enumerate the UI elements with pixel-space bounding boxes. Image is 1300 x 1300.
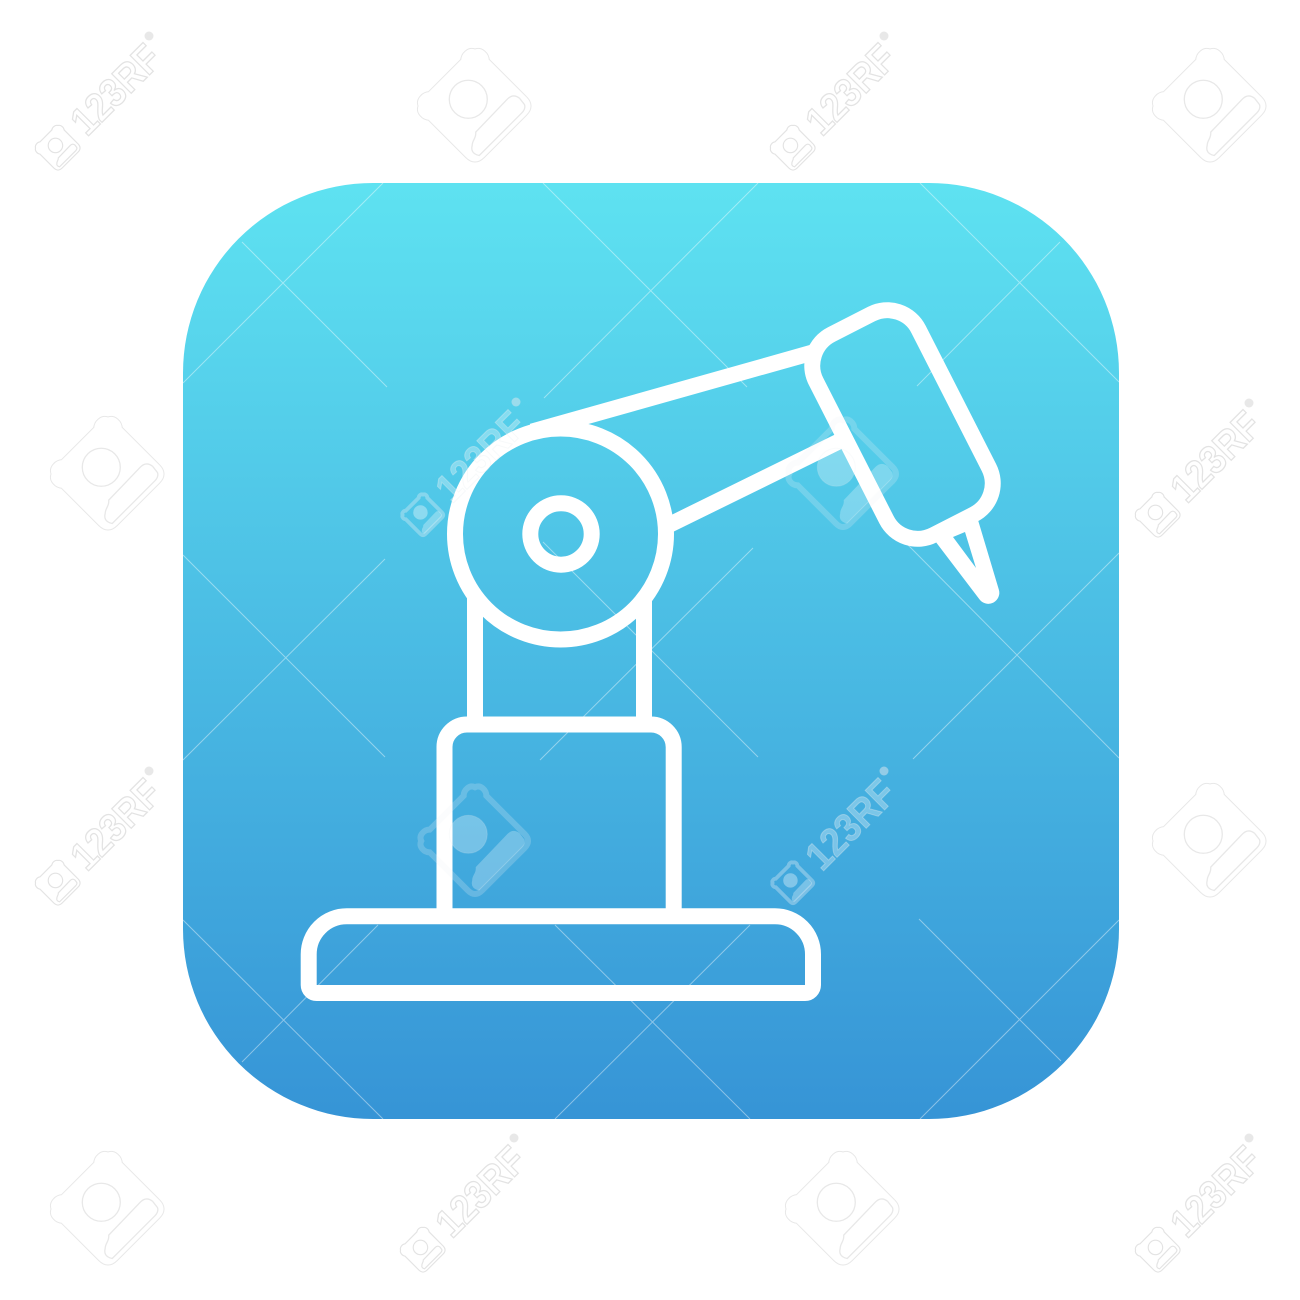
watermark: 123RF third row left: 123RF — [62, 771, 170, 879]
watermark: 123RF bottom centre — [400, 1134, 535, 1272]
watermark: logo bottom left — [47, 1148, 167, 1268]
panel: blue gradient rounded tile — [183, 183, 1119, 1119]
watermark: logo bottom centre right — [782, 1148, 902, 1268]
watermark: 123RF near base — [770, 766, 905, 905]
watermark: logo over column — [414, 780, 534, 900]
watermark: 123RF top left: 123RF — [62, 36, 170, 144]
watermark: logo second row left — [47, 413, 167, 533]
icon part: pivot ring — [530, 503, 592, 565]
watermark: 123RF second row right — [1135, 398, 1270, 537]
icon part: neck — [475, 596, 644, 725]
watermark: 123RF bottom centre: 123RF — [427, 1138, 535, 1246]
watermark: 123RF on shoulder: 123RF — [427, 403, 535, 511]
icon part: upper arm — [532, 351, 818, 432]
watermark: logo over lower arm — [782, 413, 902, 533]
icon part: column — [444, 724, 674, 917]
watermark: 123RF second row right: 123RF — [1162, 403, 1270, 511]
watermark: 123RF bottom right: 123RF — [1162, 1138, 1270, 1246]
watermark: logo top centre — [414, 45, 534, 165]
watermark: 123RF top left — [35, 32, 170, 170]
watermark: logo top far right — [1149, 45, 1269, 165]
watermark: 123RF top right: 123RF — [797, 36, 905, 144]
icon part: tool head — [800, 298, 1005, 551]
icon part: shoulder joint — [455, 428, 666, 640]
watermark: 123RF near base: 123RF — [797, 771, 905, 879]
icon: robotic arm — [309, 298, 1005, 993]
watermarks over the tile — [400, 398, 905, 905]
watermark: 123RF third row left — [35, 766, 170, 905]
icon part: lower arm — [665, 436, 850, 527]
watermark: logo third row right — [1149, 780, 1269, 900]
icon part: base plate — [309, 916, 813, 993]
watermark: 123RF bottom right — [1135, 1134, 1270, 1272]
watermark: 123RF top right — [770, 32, 905, 170]
icon part: tool tip — [933, 518, 999, 604]
watermark: 123RF on shoulder — [400, 398, 535, 537]
